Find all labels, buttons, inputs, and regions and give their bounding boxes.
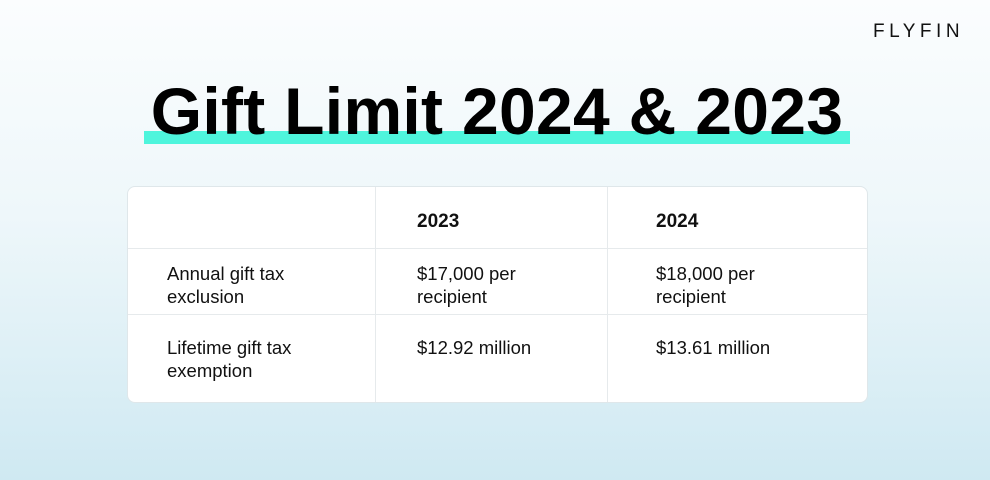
logo: FLYFIN [873, 21, 964, 42]
row label annual [167, 263, 284, 307]
title: Gift Limit 2024 & 2023 [151, 74, 843, 148]
row label annual: Annual gift tax [167, 263, 284, 284]
header 2024: 2024 [656, 211, 698, 232]
lifetime 2023: $12.92 million [417, 337, 531, 358]
row label annual: exclusion [167, 286, 244, 307]
row label lifetime: exemption [167, 360, 252, 381]
annual 2023 [417, 263, 516, 307]
annual 2023: recipient [417, 286, 487, 307]
table [127, 186, 868, 403]
annual 2024 [656, 263, 755, 307]
annual 2024: $18,000 per [656, 263, 755, 284]
annual 2024: recipient [656, 286, 726, 307]
annual 2023: $17,000 per [417, 263, 516, 284]
row label lifetime [167, 337, 292, 381]
header 2023: 2023 [417, 211, 459, 232]
row label lifetime: Lifetime gift tax [167, 337, 291, 358]
title highlight [144, 131, 850, 144]
lifetime 2024: $13.61 million [656, 337, 770, 358]
